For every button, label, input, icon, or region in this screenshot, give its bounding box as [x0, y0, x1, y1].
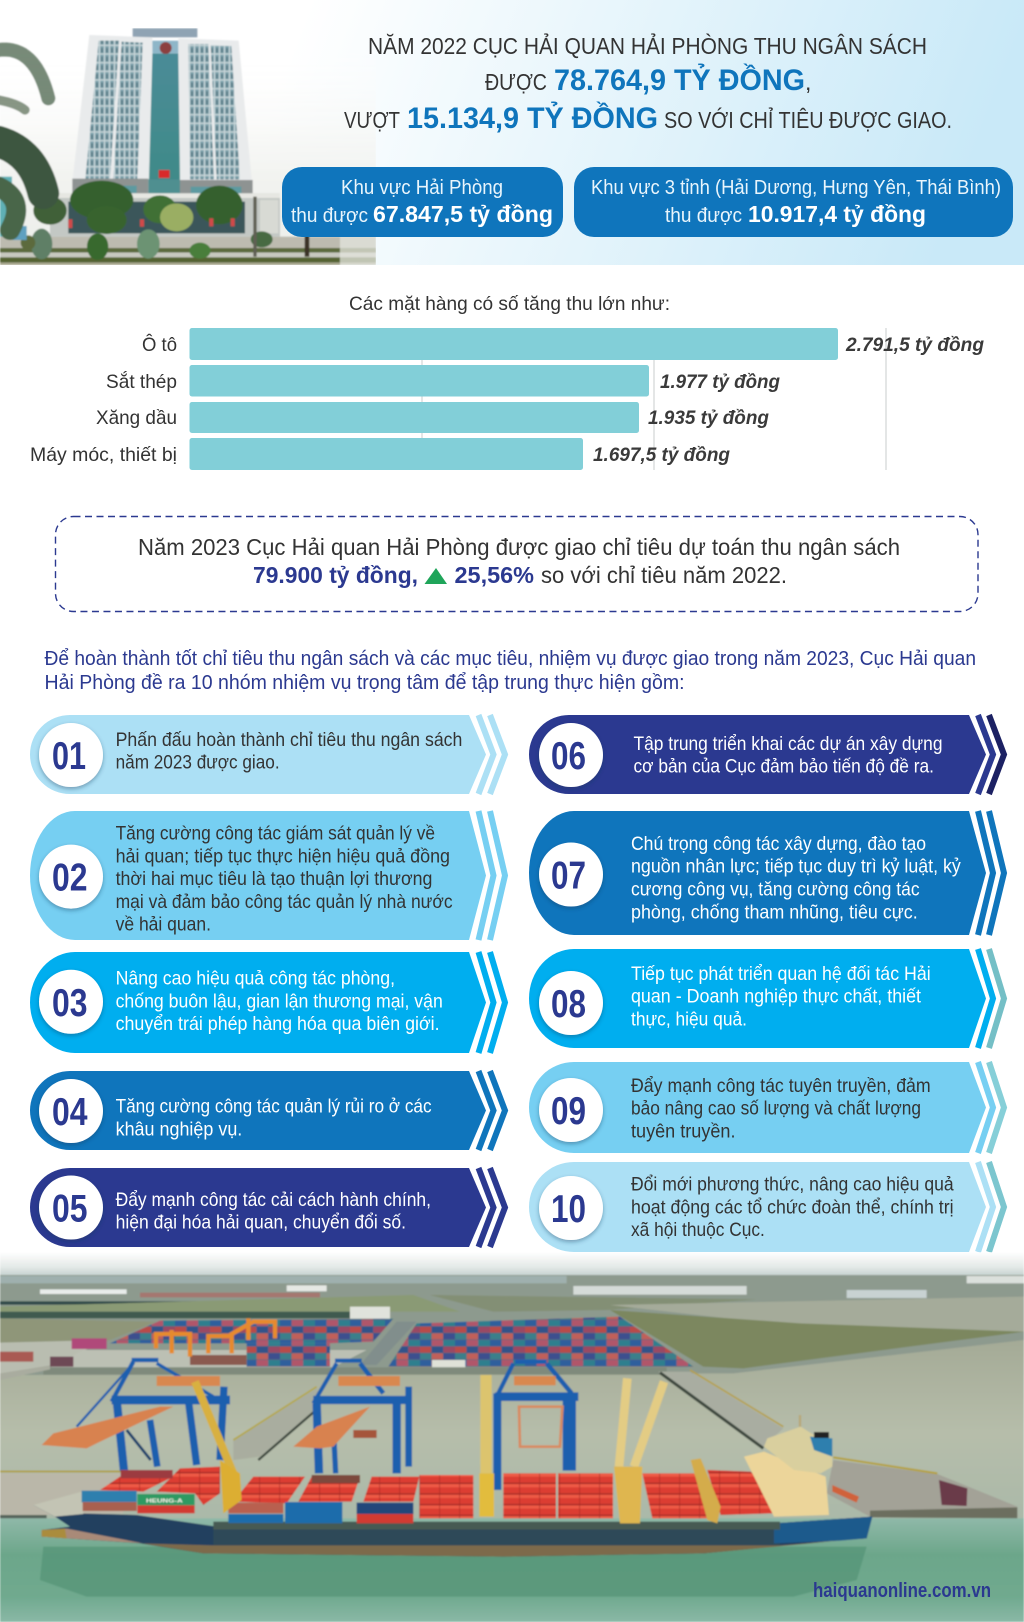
task 03	[30, 952, 505, 1053]
task 07: phòng, chống tham nhũng, tiêu cực.	[631, 902, 918, 924]
task 01	[30, 715, 505, 794]
ship superstructure	[744, 1415, 832, 1517]
title: ,	[805, 69, 811, 95]
deck containers	[82, 1458, 772, 1523]
bar: Sắt thép: Sắt thép	[106, 370, 177, 393]
callout: Khu vực Hải Phòng: 67.847,5 tỷ đồng	[373, 201, 553, 227]
bar: Sắt thép: 1.977 tỷ đồng	[660, 371, 780, 393]
container yards	[0, 1307, 693, 1367]
callout: Khu vực Hải Phòng: Khu vực Hải Phòng	[341, 176, 503, 199]
crane booms	[42, 1376, 562, 1448]
task 06: Tập trung triển khai các dự án xây dựng	[634, 733, 942, 755]
task 09: 09	[551, 1090, 586, 1133]
task 04: Tăng cường công tác quản lý rủi ro ở các	[116, 1096, 432, 1118]
title: 78.764,9 TỶ ĐỒNG	[554, 63, 805, 97]
task 08: quan - Doanh nghiệp thực chất, thiết	[631, 986, 922, 1008]
deck containers: HEUNG-A	[146, 1498, 183, 1504]
callout: Khu vực 3 tỉnh	[574, 167, 1013, 237]
trees	[70, 181, 133, 219]
task 09: tuyên truyền.	[631, 1120, 736, 1142]
task 01: 01	[52, 735, 86, 778]
bar: Ô tô	[142, 328, 984, 360]
task 03: chuyển trái phép hàng hóa qua biên giới.	[116, 1013, 440, 1035]
photo: container ship at port	[0, 1252, 1024, 1622]
bar: Máy móc, thiết bị: 1.697,5 tỷ đồng	[593, 444, 730, 466]
title: NĂM 2022 CỤC HẢI QUAN HẢI PHÒNG THU NGÂN SÁCH	[368, 31, 927, 59]
task 05: Đẩy mạnh công tác cải cách hành chính,	[116, 1189, 431, 1211]
chart heading: Các mặt hàng có số tăng thu lớn như:	[349, 293, 670, 315]
bar: Ô tô: 2.791,5 tỷ đồng	[845, 334, 984, 356]
task 08: Tiếp tục phát triển quan hệ đối tác Hải	[631, 963, 931, 985]
ship cranes	[195, 1375, 664, 1517]
task 10: 10	[551, 1188, 586, 1231]
callout: 2023 target: 25,56%	[454, 562, 534, 588]
photo: customs building	[0, 28, 376, 265]
task 07: Chú trọng công tác xây dựng, đào tạo	[631, 833, 926, 855]
palm	[0, 177, 12, 237]
task 02: về hải quan.	[116, 914, 211, 936]
header panel	[0, 0, 1024, 265]
bar chart: goods with largest revenue increase	[30, 328, 984, 470]
title: 15.134,9 TỶ ĐỒNG	[407, 101, 658, 135]
quay cranes	[77, 1360, 578, 1490]
task 02: 02	[52, 857, 88, 900]
task 10: Đổi mới phương thức, nâng cao hiệu quả	[631, 1174, 954, 1196]
callout: 2023 target	[56, 516, 978, 612]
task 08	[529, 949, 1004, 1048]
bar: Xăng dầu: Xăng dầu	[96, 407, 177, 429]
task 10	[529, 1162, 1004, 1252]
bar: Sắt thép	[106, 365, 780, 396]
task 05	[30, 1168, 505, 1247]
ship hull	[33, 1492, 872, 1557]
intro text: Để hoàn thành tốt chỉ tiêu thu ngân sách và các mục tiêu, nhiệm vụ được giao trong năm 2023, Cục Hải quan	[44, 647, 976, 670]
task 04	[30, 1071, 505, 1150]
task 07: 07	[551, 854, 586, 898]
task 10: xã hội thuộc Cục.	[631, 1219, 765, 1241]
title	[344, 31, 952, 135]
intro text: Hải Phòng đề ra 10 nhóm nhiệm vụ trọng tâm để tập trung thực hiện gồm:	[44, 671, 684, 694]
task 09: bảo nâng cao số lượng và chất lượng	[631, 1098, 921, 1120]
callout: 2023 target: 79.900 tỷ đồng,	[253, 562, 418, 588]
callout: Khu vực 3 tỉnh: 10.917,4 tỷ đồng	[748, 201, 926, 227]
task 06: 06	[551, 735, 586, 778]
task 04: khâu nghiệp vụ.	[116, 1118, 242, 1140]
task 01: Phấn đấu hoàn thành chỉ tiêu thu ngân sách	[116, 729, 462, 751]
task 07	[529, 811, 1004, 935]
task 03: 03	[52, 982, 88, 1025]
back water	[0, 1340, 1024, 1527]
sky and far land	[0, 1252, 1024, 1375]
bar: Máy móc, thiết bị: Máy móc, thiết bị	[30, 444, 177, 466]
callout: Khu vực 3 tỉnh: thu được	[665, 204, 742, 227]
task 07: cương công vụ, tăng cường công tác	[631, 879, 920, 901]
tower	[133, 28, 197, 37]
task 05: hiện đại hóa hải quan, chuyển đổi số.	[116, 1212, 406, 1234]
intro text	[44, 647, 976, 694]
bar: Xăng dầu: 1.935 tỷ đồng	[648, 407, 769, 429]
podium	[72, 179, 148, 194]
task 03: chống buôn lậu, gian lận thương mại, vận	[116, 990, 443, 1012]
callout: Khu vực Hải Phòng	[282, 167, 563, 237]
task 08: 08	[551, 983, 586, 1026]
task 06	[529, 715, 1004, 794]
quay and piers	[0, 1365, 1017, 1518]
ground	[0, 237, 376, 248]
task 09: Đẩy mạnh công tác tuyên truyền, đảm	[631, 1075, 931, 1097]
title: VƯỢT	[344, 107, 400, 133]
foreground water	[0, 1518, 1024, 1622]
bar: Máy móc, thiết bị	[30, 438, 730, 470]
task 03: Nâng cao hiệu quả công tác phòng,	[116, 968, 395, 990]
task 05: 05	[52, 1188, 88, 1230]
task 02: Tăng cường công tác giám sát quản lý về	[116, 822, 435, 844]
task 02	[30, 811, 505, 940]
task 02: mại và đảm bảo công tác quản lý nhà nước	[116, 891, 453, 913]
task 09	[529, 1062, 1004, 1153]
title: SO VỚI CHỈ TIÊU ĐƯỢC GIAO.	[664, 105, 952, 133]
task 01: năm 2023 được giao.	[116, 752, 280, 774]
task 02: thời hai mục tiêu là tạo thuận lợi thương	[116, 868, 432, 890]
bar: Xăng dầu	[96, 402, 769, 433]
callout: Khu vực Hải Phòng: thu được	[291, 204, 368, 227]
task 08: thực, hiệu quả.	[631, 1008, 747, 1030]
callout: 2023 target: Năm 2023 Cục Hải quan Hải Phòng được giao chỉ tiêu dự toán thu ngân sách	[138, 534, 900, 560]
task 07: nguồn nhân lực; tiếp tục duy trì kỷ luật, kỷ	[631, 856, 961, 878]
website credit: haiquanonline.com.vn	[813, 1580, 991, 1602]
task 02: hải quan; tiếp tục thực hiện hiệu quả đồng	[116, 845, 450, 867]
task 04: 04	[52, 1091, 88, 1134]
bar: Ô tô: Ô tô	[142, 333, 177, 356]
icon: green up triangle	[424, 568, 447, 584]
callout: 2023 target: so với chỉ tiêu năm 2022.	[541, 562, 787, 588]
title: ĐƯỢC	[485, 69, 547, 95]
task 06: cơ bản của Cục đảm bảo tiến độ đề ra.	[634, 756, 934, 778]
task 10: hoạt động các tổ chức đoàn thể, chính trị	[631, 1196, 954, 1218]
